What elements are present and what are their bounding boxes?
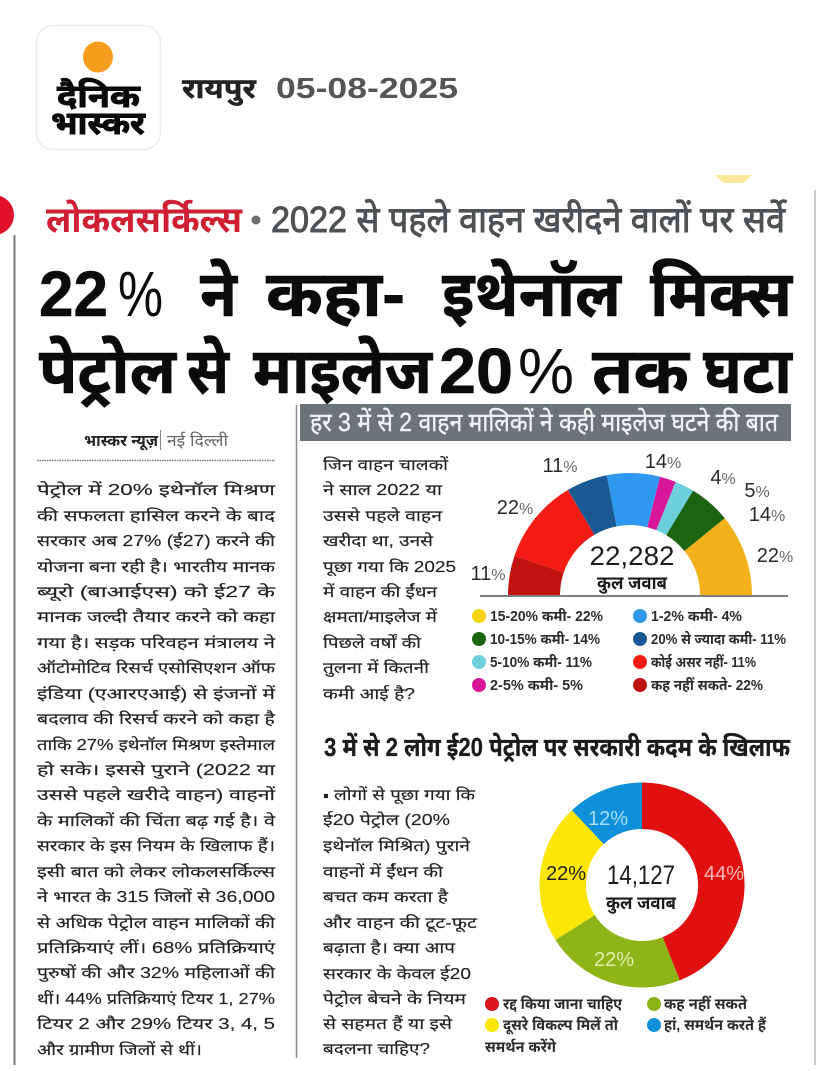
kicker text: 2022 से पहले वाहन खरीदने वालों पर सर्वे xyxy=(271,199,787,240)
mileage question text: में वाहन की ईंधन xyxy=(323,583,437,601)
donut percentage labels: 12% xyxy=(588,808,628,830)
mileage question text: पिछले वर्षों की xyxy=(323,633,422,652)
segment: no effect xyxy=(539,512,581,564)
article body text: बदलाव की रिसर्च करने को कहा है xyxy=(37,709,276,728)
byline xyxy=(84,430,229,451)
edition city: रायपुर xyxy=(182,73,257,106)
article body text: उससे पहले खरीदे वाहन) वाहनों xyxy=(37,785,276,804)
main headline: पेट्रोल xyxy=(39,335,178,407)
segment: 1-2 percent xyxy=(612,499,654,502)
segment: 15-20 percent xyxy=(705,535,726,595)
semi-donut legend: कोई असर नहीं- 11% xyxy=(651,654,756,671)
article body text: गया है। सड़क परिवहन मंत्रालय ने xyxy=(37,633,276,652)
byline: भास्कर न्यूज़ xyxy=(84,433,158,451)
semi-donut centre total: कुल जवाब xyxy=(597,573,668,594)
donut percentage labels: 44% xyxy=(704,863,744,885)
semi-donut percentage labels: 5% xyxy=(744,480,770,502)
segment: over 20 percent xyxy=(581,501,612,512)
clipping decorative sun fragment xyxy=(714,175,752,183)
article body text: ताकि 27% इथेनॉल मिश्रण इस्तेमाल xyxy=(37,735,276,754)
logo word two: भास्कर xyxy=(51,105,146,141)
semi-donut legend: 5-10% कमी- 11% xyxy=(490,654,592,671)
article body text: की सफलता हासिल करने के बाद xyxy=(37,506,276,525)
red corner marker xyxy=(0,195,14,235)
donut percentage labels xyxy=(546,808,744,971)
semi-donut legend: 20% से ज्यादा कमी- 11% xyxy=(651,630,786,648)
article body text: सरकार के इस नियम के खिलाफ हैं। xyxy=(37,836,275,855)
donut centre total xyxy=(606,860,677,914)
semi-donut legend: 2-5% कमी- 5% xyxy=(490,677,583,694)
article body text: के मालिकों की चिंता बढ़ गई है। वे xyxy=(37,811,275,830)
article body text: हो सके। इससे पुराने (2022 या xyxy=(37,760,276,780)
mileage question text: कमी आई है? xyxy=(323,684,415,703)
logo word one: दैनिक xyxy=(57,78,142,114)
article body text: थीं। 44% प्रतिक्रियाएं टियर 1, 27% xyxy=(37,990,275,1008)
main headline: मिक्स xyxy=(650,258,794,330)
article body text: सरकार अब 27% (ई27) करने की xyxy=(37,531,276,550)
E20 question text: बढ़ाता है। क्या आप xyxy=(323,938,456,957)
donut percentage labels: 22% xyxy=(546,863,586,885)
kicker line xyxy=(46,199,787,240)
mileage question text: जिन वाहन चालकों xyxy=(323,456,449,474)
semi-donut centre total xyxy=(590,541,674,594)
E20 question text: लोगों से पूछा गया कि xyxy=(334,785,476,805)
article body text xyxy=(37,480,277,1059)
kicker source: लोकलसर्किल्स xyxy=(46,199,243,240)
semi-donut percentage labels: 14% xyxy=(645,451,681,473)
segment: cannot say xyxy=(534,564,539,595)
segment: 10-15 percent xyxy=(680,513,705,535)
E20 question text: ई20 पेट्रोल (20% xyxy=(323,810,450,829)
donut centre total: 14,127 xyxy=(607,860,675,890)
segment: support with other options xyxy=(563,827,588,928)
article body text: पेट्रोल में 20% इथेनॉल मिश्रण xyxy=(37,480,276,499)
app logo xyxy=(36,26,160,150)
byline: नई दिल्ली xyxy=(167,431,229,450)
mileage question text: तुलना में कितनी xyxy=(323,659,430,678)
main headline xyxy=(39,258,794,407)
article body text: इंडिया (एआरएआई) से इंजनों में xyxy=(37,684,276,703)
article body text: इसी बात को लेकर लोकलसर्किल्स xyxy=(37,862,276,881)
semi-donut percentage labels: 11% xyxy=(542,455,578,477)
article body text: ब्यूरो (बाआईएस) को ई27 के xyxy=(37,582,277,602)
article body text: पुरुषों की और 32% महिलाओं की xyxy=(37,964,276,983)
donut legend: दूसरे विकल्प मिलें तो xyxy=(503,1016,619,1035)
E20 question text: सरकार के केवल ई20 xyxy=(323,964,471,983)
semi-donut legend: 10-15% कमी- 14% xyxy=(490,631,600,648)
article body text: ऑटोमोटिव रिसर्च एसोसिएशन ऑफ xyxy=(37,659,276,677)
semi-donut chart: mileage drop xyxy=(534,499,726,595)
semi-donut percentage labels: 22% xyxy=(757,545,793,567)
semi-donut legend xyxy=(472,608,786,694)
semi-donut centre total: 22,282 xyxy=(590,541,674,571)
article body text: और ग्रामीण जिलों से थीं। xyxy=(37,1040,202,1059)
edition date: 05-08-2025 xyxy=(276,73,458,105)
segment: 2-5 percent xyxy=(654,502,666,506)
mileage question text: उससे पहले वाहन xyxy=(323,506,442,525)
E20 question text: और वाहन की टूट-फूट xyxy=(323,914,478,933)
donut percentage labels: 22% xyxy=(594,949,634,971)
segment: yes, support xyxy=(588,806,642,827)
E20 question text: बदलना चाहिए? xyxy=(323,1040,430,1058)
main headline: माइलेज xyxy=(253,335,434,407)
main headline: तक xyxy=(592,335,691,407)
semi-donut percentage labels: 4% xyxy=(710,467,736,489)
E20 question text: इथेनॉल मिश्रित) पुराने xyxy=(323,836,470,856)
main headline: कहा- xyxy=(266,258,405,330)
semi-donut percentage labels: 22% xyxy=(497,497,533,519)
article body text: मानक जल्दी तैयार करने को कहा xyxy=(37,607,276,626)
E20 question text: से सहमत हैं या इसे xyxy=(323,1014,453,1033)
donut centre total: कुल जवाब xyxy=(606,893,677,914)
article body text: योजना बना रही है। भारतीय मानक xyxy=(37,557,276,576)
icon: logo sun xyxy=(83,42,113,72)
article body text: टियर 2 और 29% टियर 3, 4, 5 xyxy=(37,1015,275,1033)
donut legend: रद्द किया जाना चाहिए xyxy=(503,996,623,1013)
E20 question text: पेट्रोल बेचने के नियम xyxy=(323,989,467,1008)
mileage question text xyxy=(323,456,456,703)
section banner: mileage: हर 3 में से 2 वाहन मालिकों ने कही माइलेज घटने की बात xyxy=(310,407,779,437)
main headline: इथेनॉल xyxy=(442,258,623,330)
main headline: % xyxy=(518,335,574,407)
kicker bullet xyxy=(252,216,260,224)
main headline: 20 xyxy=(439,335,513,407)
donut legend: हां, समर्थन करते हैं xyxy=(664,1016,767,1034)
segment: 5-10 percent xyxy=(666,506,680,513)
semi-donut percentage labels: 11% xyxy=(470,563,506,585)
donut chart: E20 opinion xyxy=(563,806,721,964)
article body text: प्रतिक्रियाएं लीं। 68% प्रतिक्रियाएं xyxy=(37,939,276,957)
E20 question text: वाहनों में ईंधन की xyxy=(323,863,444,881)
semi-donut percentage labels xyxy=(470,451,793,585)
main headline: से xyxy=(187,335,231,407)
main headline: ने xyxy=(200,258,239,330)
article body text: से अधिक पेट्रोल वाहन मालिकों की xyxy=(37,913,276,932)
donut legend: कह नहीं सकते xyxy=(664,995,748,1013)
main headline: % xyxy=(118,258,163,330)
E20 question text xyxy=(323,785,478,1058)
main headline: घटा xyxy=(703,335,793,407)
segment: cannot say xyxy=(575,928,671,964)
mileage question text: ने साल 2022 या xyxy=(323,480,443,499)
mileage question text: क्षमता/माइलेज में xyxy=(323,607,438,626)
donut legend xyxy=(485,995,767,1056)
mileage question text: खरीदा था, उनसे xyxy=(323,531,434,550)
semi-donut legend: 15-20% कमी- 22% xyxy=(490,608,603,625)
segment: should be cancelled xyxy=(642,806,721,959)
E20 question text: बचत कम करता है xyxy=(323,887,449,906)
donut legend: समर्थन करेंगे xyxy=(485,1038,557,1056)
main headline: 22 xyxy=(39,258,108,330)
semi-donut percentage labels: 14% xyxy=(749,504,785,526)
article body text: ने भारत के 315 जिलों से 36,000 xyxy=(37,887,275,906)
semi-donut legend: कह नहीं सकते- 22% xyxy=(651,676,763,694)
semi-donut legend: 1-2% कमी- 4% xyxy=(651,608,742,625)
mileage question text: पूछा गया कि 2025 xyxy=(323,558,456,577)
